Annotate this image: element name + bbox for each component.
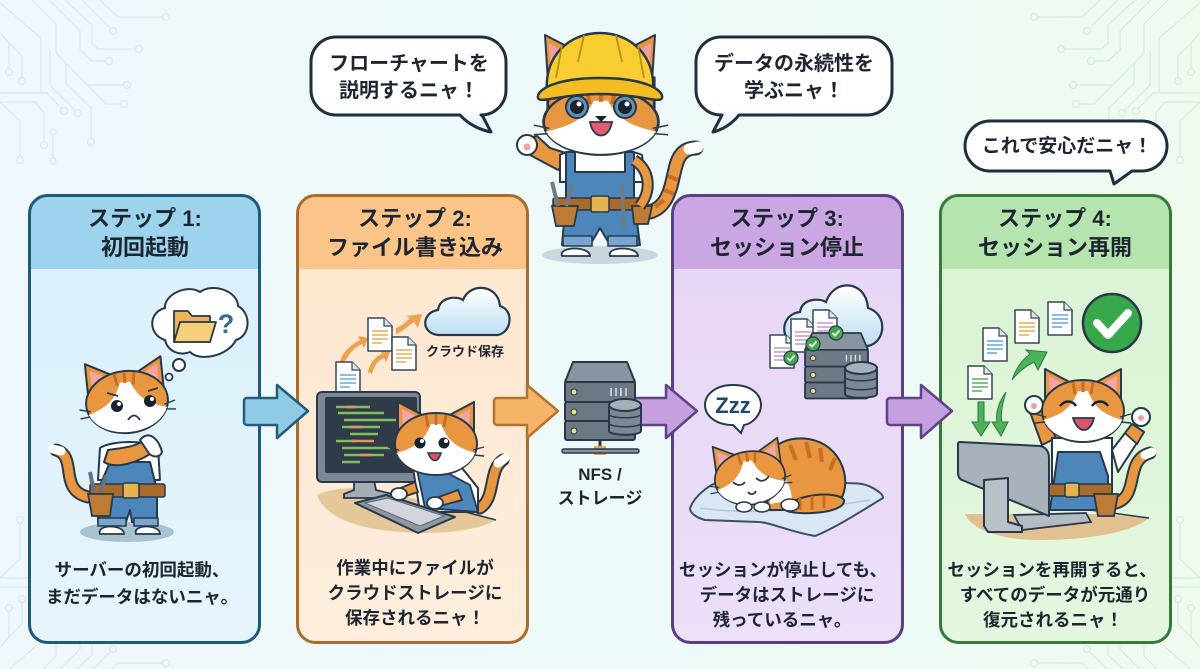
icon: sleeping cat on pillow xyxy=(690,436,883,536)
icon: coding cat at monitor xyxy=(317,392,505,533)
text block: step 4: 復元されるニャ！ xyxy=(983,610,1123,630)
heading: step 3: ステップ 3: xyxy=(730,206,844,231)
speech bubble: relief xyxy=(965,121,1167,184)
arrow: step 3 to step 4 xyxy=(887,385,952,438)
arrow: step 2 to storage xyxy=(494,385,558,438)
arrow: step 1 to step 2 xyxy=(244,385,308,438)
icon: thought bubble with folder xyxy=(152,288,248,380)
speech bubble: data persistence: 学ぶニャ！ xyxy=(744,79,844,102)
text block: step 2: 保存されるニャ！ xyxy=(345,608,485,628)
icon: happy cat at monitor xyxy=(958,369,1152,540)
panel: step 3 xyxy=(672,196,902,642)
text block: step 1: サーバーの初回起動、 xyxy=(55,560,229,580)
text block: step 2: 作業中にファイルが xyxy=(336,558,494,578)
speech bubble: flowchart: 説明するニャ！ xyxy=(339,79,479,102)
heading: step 2: ステップ 2: xyxy=(358,206,472,231)
text block: step 3: データはストレージに xyxy=(700,585,874,605)
panel: step 4 xyxy=(940,196,1170,642)
label: NFS storage: ストレージ xyxy=(558,489,642,508)
speech bubble: relief: これで安心だニャ！ xyxy=(982,135,1152,157)
text block: step 2: クラウドストレージに xyxy=(328,583,502,603)
icon: cloud xyxy=(425,288,510,335)
heading: step 4: ステップ 4: xyxy=(998,206,1112,231)
heading: step 1: ステップ 1: xyxy=(88,206,202,231)
panel: step 1 xyxy=(30,196,260,642)
icon: NFS storage server xyxy=(562,362,641,455)
heading: step 3: セッション停止 xyxy=(710,235,864,260)
icon: thinking cat xyxy=(53,355,178,542)
arrow: storage to step 3 xyxy=(630,385,697,438)
speech bubble: data persistence xyxy=(696,37,892,132)
panel: step 2 xyxy=(298,196,528,642)
icon: Zzz speech bubble xyxy=(705,385,761,433)
icon: green check xyxy=(1083,294,1141,352)
heading: step 1: 初回起動 xyxy=(101,235,189,260)
icon: mascot cat with hard hat xyxy=(517,33,698,264)
speech bubble: data persistence: データの永続性を xyxy=(714,51,874,75)
text block: step 4: セッションを再開すると、 xyxy=(947,560,1157,580)
label: NFS storage: NFS / xyxy=(578,465,622,484)
icon: restored documents and arrows xyxy=(968,302,1072,436)
icon: Zzz speech bubble: Zzz xyxy=(715,393,751,418)
text block: step 1: まだデータはないニャ。 xyxy=(46,587,238,607)
heading: step 4: セッション再開 xyxy=(978,235,1132,260)
icon: thought bubble with folder: ? xyxy=(218,309,234,339)
text block: step 3: セッションが停止しても、 xyxy=(679,560,887,580)
text block: step 3: 残っているニャ。 xyxy=(713,610,851,630)
text block: step 4: すべてのデータが元通り xyxy=(960,585,1150,605)
icon: documents and arrows xyxy=(336,314,422,395)
icon: cloud, server and saved documents xyxy=(770,285,882,399)
heading: step 2: ファイル書き込み xyxy=(327,235,503,260)
label: cloud storage: クラウド保存 xyxy=(426,344,504,359)
speech bubble: flowchart: フローチャートを xyxy=(329,52,489,75)
speech bubble: flowchart xyxy=(311,37,506,132)
